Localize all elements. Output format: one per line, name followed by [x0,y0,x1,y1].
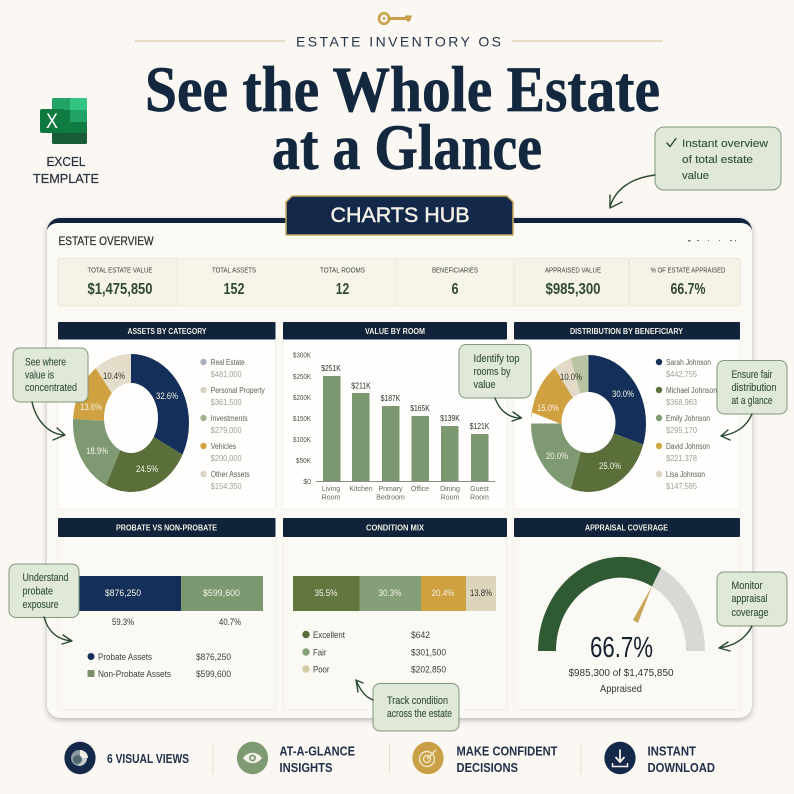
callout: see where value is concentrated: value is [25,370,54,382]
legend: condition mix: $642 [411,630,430,640]
bar chart: value by room: $211K [351,382,371,390]
callout: see where value is concentrated: concentrated [25,382,77,394]
legend: assets by category: $200,000 [211,454,242,463]
bar chart: value by room: $300K [293,352,311,360]
label: Excel template: EXCEL [46,154,86,169]
KPI: total assets: TOTAL ASSETS [212,268,256,274]
legend: probate: Non-Probate Assets [98,669,171,679]
legend: assets by category: $361,500 [211,398,242,407]
legend: assets by category: Other Assets [211,470,250,479]
panel: assets by category: ASSETS BY CATEGORY [128,327,207,336]
panel: condition mix [283,518,507,710]
panel: value by room: VALUE BY ROOM [365,327,425,336]
banner: Charts Hub: CHARTS HUB [330,204,470,227]
callout: track condition [373,684,459,731]
bar chart: value by room: $251K [321,364,341,373]
donut chart: distribution by beneficiary: 25.0% [599,461,621,471]
donut chart: assets by category: 13.6% [80,402,102,412]
legend: assets by category: Investments [211,414,248,423]
legend: condition mix: Fair [313,648,327,658]
arrow: to gauge [719,626,752,651]
legend: assets by category [200,358,265,491]
KPI: total assets [212,268,256,298]
icon: gold key [379,13,412,24]
donut chart: assets by category: 10.4% [103,371,125,381]
legend: assets by category: $154,350 [211,482,242,491]
title: at a Glance [272,112,542,184]
stacked bar: condition mix [293,576,496,611]
callout: track condition: across the estate [387,708,452,720]
eyebrow: Estate Inventory OS: ESTATE INVENTORY OS [296,34,501,50]
legend: beneficiaries: $221,378 [666,454,698,463]
callout: monitor appraisal coverage: appraisal [732,593,768,605]
callout: see where value is concentrated [13,348,88,402]
bar chart: value by room: $250K [293,374,311,381]
bar chart: value by room: Room [322,494,340,502]
KPI: appraised value [545,268,601,298]
footer feature: 6 visual views: 6 VISUAL VIEWS [107,751,189,766]
legend: beneficiaries: Michael Johnson [666,386,717,395]
KPI: total estate value: $1,475,850 [88,281,153,298]
panel: distribution by beneficiary: DISTRIBUTION BY BENEFICIARY [570,327,684,336]
bar chart: value by room: $150K [293,416,311,423]
callout: understand probate exposure: exposure [22,599,58,611]
bar chart: value by room: Room [470,494,489,502]
arrow: to beneficiary legend [721,414,752,440]
callout: ensure fair distribution: at a glance [732,395,772,407]
stacked bar: condition mix: 20.4% [432,588,454,598]
legend: beneficiaries [656,358,717,491]
legend: beneficiaries: $147,585 [666,482,698,491]
legend: probate: $599,600 [196,669,231,679]
bar chart: value by room: Bedroom [376,494,405,502]
bar chart: value by room: Primary [378,486,403,493]
legend: probate: $876,250 [196,652,231,662]
legend: beneficiaries: $295,170 [666,426,698,435]
bar chart: value by room: Dining [440,486,460,493]
legend: assets by category: $279,000 [211,426,242,435]
bar chart: value by room: $187K [381,394,401,403]
label: Excel template: TEMPLATE [33,171,99,186]
callout: instant overview: Instant overview [682,138,768,150]
callout: see where value is concentrated: See where [25,356,66,368]
bar chart: value by room: $139K [440,414,460,423]
bar chart: value by room: $100K [293,437,311,444]
gauge chart: appraisal coverage: $985,300 of $1,475,850 [568,668,674,679]
callout: identify top rooms: rooms by [474,366,511,378]
callout: understand probate exposure [9,564,79,618]
footer feature: at-a-glance insights: AT-A-GLANCE [280,744,355,758]
callout: ensure fair distribution [717,360,787,414]
stacked bar: probate split: 59.3% [112,617,134,627]
donut chart: assets by category: 24.5% [136,464,158,474]
KPI: percent of estate appraised: 66.7% [670,281,706,298]
legend: beneficiaries: David Johnson [666,442,710,451]
callout: identify top rooms: Identify top [474,353,520,365]
footer feature: instant download [604,742,715,775]
bar chart: value by room: Office [411,486,429,493]
arrow: to category donut [32,402,65,440]
KPI: total rooms [320,268,365,298]
callout: understand probate exposure: Understand [22,572,68,584]
panel: probate vs non-probate: PROBATE VS NON-PROBATE [116,524,218,532]
KPI: percent of estate appraised: % OF ESTATE APPRAISED [650,268,726,274]
dashboard card [47,218,752,718]
title: See the Whole Estate [145,54,660,126]
footer feature: at-a-glance insights [237,742,355,775]
KPI: total assets: 152 [224,281,245,298]
KPI: total estate value: TOTAL ESTATE VALUE [88,268,153,274]
panel: condition mix: CONDITION MIX [366,524,425,532]
legend: assets by category: $481,000 [211,370,242,379]
callout: instant overview [655,127,781,190]
donut chart: distribution by beneficiary: 15.0% [537,403,559,413]
heading: Estate Overview: ESTATE OVERVIEW [58,234,154,248]
divider [212,744,214,774]
footer feature: instant download: INSTANT [648,744,696,758]
footer feature: 6 visual views [64,742,189,774]
donut chart: distribution by beneficiary: 10.0% [560,372,582,382]
panel: probate vs non-probate [58,518,276,710]
footer feature: make confident decisions: MAKE CONFIDENT [456,744,558,758]
footer feature: make confident decisions: DECISIONS [456,760,518,775]
callout: monitor appraisal coverage: Monitor [732,580,763,592]
bar chart: value by room: Kitchen [349,486,373,493]
footer feature: instant download: DOWNLOAD [648,760,715,775]
stacked bar: condition mix: 30.3% [378,588,402,598]
gauge chart: appraisal coverage: Appraised [600,684,642,695]
arrow: overview callout to card [610,175,655,208]
legend: probate: Probate Assets [98,652,152,662]
bar chart: value by room: $0 [303,479,311,486]
KPI: beneficiaries: BENEFICIARIES [432,268,478,274]
legend: beneficiaries: $442,755 [666,370,698,379]
bar chart: value by room: $121K [470,422,490,431]
legend: beneficiaries: Emily Johnson [666,414,710,423]
legend: condition mix: $202,850 [411,664,446,674]
footer feature: at-a-glance insights: INSIGHTS [280,760,333,775]
legend: condition mix [302,630,446,674]
legend: beneficiaries: $368,963 [666,398,698,407]
bar chart: value by room [293,352,495,502]
callout: instant overview: value [682,170,709,182]
KPI: total rooms: TOTAL ROOMS [320,268,365,274]
arrow: to condition legend [356,680,373,700]
legend: beneficiaries: Sarah Johnson [666,358,711,367]
gauge chart: appraisal coverage: 66.7% [590,632,653,664]
panel: appraisal coverage: APPRAISAL COVERAGE [585,524,669,532]
KPI: beneficiaries [432,268,478,298]
callout: identify top rooms [459,344,531,398]
donut chart: assets by category: 32.6% [156,391,178,401]
callout: ensure fair distribution: distribution [732,382,776,394]
callout: instant overview: of total estate [682,154,753,166]
legend: condition mix: Poor [313,664,330,674]
legend: beneficiaries: Lisa Johnson [666,470,705,479]
stacked bar: condition mix: 13.8% [470,588,492,598]
gauge chart: appraisal coverage [538,557,705,695]
divider [389,744,390,774]
callout: track condition: Track condition [387,695,448,707]
stacked bar: probate split: 40.7% [219,617,241,627]
KPI: total rooms: 12 [336,281,349,298]
label: Excel template [33,154,99,186]
toolbar marks [688,240,736,242]
title [145,54,660,184]
donut chart: distribution by beneficiary [537,372,634,471]
stacked bar: probate split: $599,600 [203,588,240,598]
KPI: total estate value [88,268,153,298]
KPI: percent of estate appraised [650,268,726,298]
KPI: appraised value: APPRAISED VALUE [545,268,601,274]
bar chart: value by room: $165K [410,404,430,413]
icon: Excel logo [40,98,87,144]
legend: condition mix: Excellent [313,630,345,640]
stacked bar: probate split [72,576,263,627]
panel: assets by category [58,322,276,509]
icon: Excel logo: X [46,110,58,133]
bar chart: value by room: $50K [296,458,311,465]
panel: appraisal coverage [514,518,740,710]
legend: assets by category: Personal Property [211,386,265,395]
donut chart: distribution by beneficiary: 30.0% [612,389,634,399]
legend: assets by category: Vehicles [211,442,236,451]
callout: identify top rooms: value [474,379,496,391]
KPI row [58,258,740,306]
legend: assets by category: Real Estate [211,358,245,367]
KPI: beneficiaries: 6 [452,281,459,298]
arrow: to beneficiary donut [495,398,522,421]
KPI: appraised value: $985,300 [546,281,601,298]
callout: monitor appraisal coverage [717,572,787,626]
arrow: to probate legend [44,617,72,644]
stacked bar: probate split: $876,250 [105,588,141,598]
callout: ensure fair distribution: Ensure fair [732,369,773,381]
panel: distribution by beneficiary [514,322,740,509]
legend: condition mix: $301,500 [411,648,446,658]
banner: Charts Hub [286,196,513,235]
donut chart: distribution by beneficiary: 20.0% [546,451,568,461]
legend: probate [88,652,231,679]
callout: understand probate exposure: probate [22,586,53,598]
panel: value by room [283,322,507,509]
bar chart: value by room: Guest [470,486,489,493]
callout: monitor appraisal coverage: coverage [732,607,768,619]
donut chart: assets by category: 18.9% [86,446,108,456]
stacked bar: condition mix: 35.5% [314,588,338,598]
divider [580,744,582,774]
donut chart: assets by category [80,371,178,474]
footer feature: make confident decisions [412,742,558,775]
bar chart: value by room: Living [322,486,340,493]
bar chart: value by room: $200K [293,395,311,402]
bar chart: value by room: Room [441,494,459,502]
